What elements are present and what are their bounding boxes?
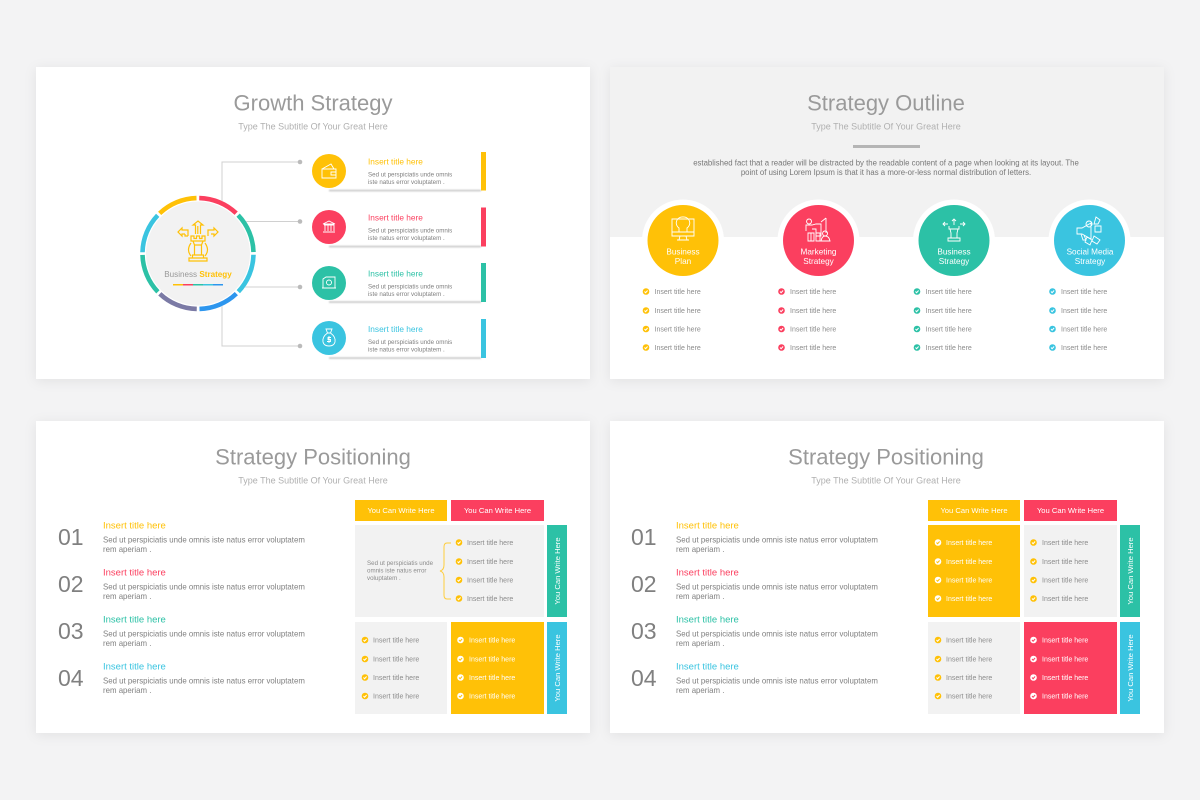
- heading: strategy positioning: Strategy Positioning: [215, 444, 411, 470]
- checklist: merged cell: [456, 539, 513, 603]
- checklist: Insert title here: [926, 345, 972, 352]
- checklist: [643, 288, 701, 352]
- numbered list: Insert title here: [103, 662, 166, 672]
- checklist: upper left cell: Insert title here: [946, 540, 992, 547]
- numbered list: rem aperiam .: [103, 592, 151, 601]
- column: business plan: Business: [666, 248, 700, 256]
- numbered list: Insert title here: [103, 568, 166, 578]
- checklist: lower right cell: Insert title here: [469, 638, 515, 644]
- column: business plan: [642, 200, 724, 352]
- matrix grid: You Can Write Here: [464, 506, 531, 515]
- label: business strategy: Business Strategy: [164, 270, 232, 279]
- checklist: lower left cell: Insert title here: [373, 638, 419, 644]
- checklist: lower left cell: Insert title here: [946, 656, 992, 664]
- numbered list: 04: [631, 665, 657, 691]
- item 1: wallet: Sed ut perspiciatis unde omnis: [368, 172, 452, 178]
- column: business strategy: Business: [937, 248, 971, 256]
- segmented ring: business strategy: [120, 175, 276, 332]
- matrix grid: [355, 500, 567, 714]
- column: business strategy: Strategy: [939, 257, 970, 266]
- checklist: [778, 288, 836, 352]
- checklist: lower right cell: Insert title here: [1042, 675, 1088, 682]
- connector lines: [222, 160, 302, 348]
- item 4: money bag: Sed ut perspiciatis unde omnis: [368, 339, 452, 346]
- matrix grid: [928, 500, 1140, 714]
- checklist: Insert title here: [926, 289, 972, 296]
- checklist: Insert title here: [654, 289, 701, 296]
- checklist: lower left cell: Insert title here: [946, 694, 992, 700]
- numbered list: 02: [58, 571, 84, 597]
- item 3: safe: iste natus error voluptatem .: [368, 291, 445, 298]
- matrix grid: You Can Write Here: [553, 537, 562, 605]
- numbered list: Insert title here: [676, 568, 739, 578]
- icon: monitor with bulb: [672, 217, 694, 240]
- checklist: upper right cell: Insert title here: [1042, 540, 1088, 547]
- subtitle: Type The Subtitle Of Your Great Here: [238, 122, 388, 132]
- numbered list: Sed ut perspiciatis unde omnis iste natus error voluptatem: [103, 676, 305, 686]
- checklist: [914, 288, 972, 352]
- icon: megaphone and social badges: [1077, 217, 1101, 245]
- numbered list: Sed ut perspiciatis unde omnis iste natus error voluptatem: [103, 582, 305, 592]
- checklist: lower right cell: Insert title here: [1042, 656, 1088, 664]
- column: marketing strategy: Strategy: [803, 257, 835, 266]
- checklist: Insert title here: [654, 326, 701, 334]
- numbered list: rem aperiam .: [676, 639, 724, 648]
- matrix grid: You Can Write Here: [553, 634, 562, 702]
- item 1: wallet: iste natus error voluptatem .: [368, 179, 445, 186]
- panel: strategy outline: [610, 67, 1164, 379]
- merged cell text: voluptatem .: [367, 575, 401, 582]
- numbered list: rem aperiam .: [103, 639, 151, 648]
- checklist: upper right cell: [1030, 539, 1088, 603]
- checklist: lower right cell: Insert title here: [1042, 638, 1088, 644]
- intro paragraph: point of using Lorem Ipsum is that it has a more-or-less normal distribution of letters.: [741, 168, 1031, 177]
- checklist: Insert title here: [790, 326, 836, 334]
- checklist: lower right cell: [1030, 637, 1088, 700]
- item 2: bank: Sed ut perspiciatis unde omnis: [368, 228, 452, 234]
- icon: megaphone and people: [806, 218, 830, 241]
- item 4: money bag: iste natus error voluptatem .: [368, 346, 445, 354]
- colour underline: [173, 284, 223, 286]
- checklist: upper right cell: Insert title here: [1042, 596, 1088, 603]
- checklist: lower right cell: Insert title here: [469, 694, 515, 700]
- subtitle: Type The Subtitle Of Your Great Here: [238, 476, 388, 486]
- intro paragraph: [693, 158, 1079, 177]
- checklist: upper left cell: Insert title here: [946, 578, 992, 584]
- numbered list: Insert title here: [103, 614, 166, 626]
- matrix grid: You Can Write Here: [1037, 506, 1104, 515]
- checklist: Insert title here: [790, 345, 836, 352]
- numbered list: rem aperiam .: [676, 545, 724, 554]
- checklist: lower left cell: Insert title here: [373, 656, 419, 664]
- checklist: merged cell: Insert title here: [467, 596, 513, 603]
- numbered list: Insert title here: [103, 520, 166, 532]
- item 1: wallet: Insert title here: [368, 156, 423, 166]
- subtitle: Type The Subtitle Of Your Great Here: [811, 476, 961, 486]
- numbered list: Insert title here: [676, 520, 739, 532]
- numbered list: 01: [631, 524, 657, 550]
- numbered list: 03: [631, 618, 657, 644]
- checklist: upper left cell: [935, 539, 992, 603]
- item 3: safe: Insert title here: [368, 268, 423, 278]
- icon: wallet: [322, 164, 336, 178]
- item 4: money bag: [312, 319, 486, 359]
- checklist: lower left cell: Insert title here: [373, 694, 419, 700]
- numbered list: rem aperiam .: [103, 686, 151, 695]
- panel: growth strategy: [36, 67, 1164, 733]
- matrix grid: You Can Write Here: [367, 506, 435, 515]
- matrix grid: You Can Write Here: [940, 506, 1008, 515]
- numbered list: Sed ut perspiciatis unde omnis iste natus error voluptatem: [103, 536, 305, 544]
- checklist: lower left cell: [935, 637, 992, 700]
- checklist: Insert title here: [1061, 345, 1107, 352]
- column: marketing strategy: Marketing: [801, 248, 837, 256]
- numbered list: Sed ut perspiciatis unde omnis iste natus error voluptatem: [676, 536, 878, 544]
- numbered list: 01: [58, 524, 84, 550]
- checklist: Insert title here: [654, 308, 701, 315]
- checklist: merged cell: Insert title here: [467, 540, 513, 547]
- checklist: Insert title here: [790, 289, 836, 296]
- checklist: Insert title here: [926, 308, 972, 315]
- intro paragraph: established fact that a reader will be distracted by the readable content of a page when looking at its layout. The: [693, 158, 1079, 168]
- numbered list: Sed ut perspiciatis unde omnis iste natus error voluptatem: [103, 630, 305, 638]
- column: business plan: Plan: [675, 257, 692, 266]
- checklist: lower left cell: [362, 637, 419, 700]
- checklist: upper left cell: Insert title here: [946, 596, 992, 603]
- bracket: [440, 543, 451, 599]
- checklist: [1049, 288, 1107, 352]
- checklist: Insert title here: [1061, 326, 1107, 334]
- icon: safe: [322, 277, 336, 288]
- checklist: merged cell: Insert title here: [467, 578, 513, 584]
- item 1: wallet: [312, 152, 486, 191]
- item 3: safe: [312, 263, 486, 303]
- subtitle: Type The Subtitle Of Your Great Here: [811, 122, 961, 132]
- item 2: bank: Insert title here: [368, 212, 423, 222]
- checklist: lower right cell: Insert title here: [469, 675, 515, 682]
- column: marketing strategy: [778, 200, 860, 352]
- checklist: upper right cell: Insert title here: [1042, 559, 1088, 566]
- icon: chess rook with arrows: [178, 221, 218, 261]
- checklist: Insert title here: [1061, 308, 1107, 315]
- checklist: Insert title here: [926, 326, 972, 334]
- numbered list: rem aperiam .: [103, 545, 151, 554]
- numbered list: Sed ut perspiciatis unde omnis iste natus error voluptatem: [676, 676, 878, 686]
- item 3: safe: Sed ut perspiciatis unde omnis: [368, 284, 452, 290]
- checklist: merged cell: Insert title here: [467, 559, 513, 566]
- numbered list: 02: [631, 571, 657, 597]
- numbered list: 03: [58, 618, 84, 644]
- merged cell text: Sed ut perspiciatis unde: [367, 560, 434, 567]
- heading: strategy positioning: Strategy Positioning: [788, 444, 984, 470]
- numbered list: rem aperiam .: [676, 686, 724, 695]
- numbered list: Sed ut perspiciatis unde omnis iste natus error voluptatem: [676, 582, 878, 592]
- numbered list: 04: [58, 665, 84, 691]
- item 4: money bag: Insert title here: [368, 324, 423, 334]
- checklist: lower right cell: Insert title here: [469, 656, 515, 664]
- checklist: upper right cell: Insert title here: [1042, 578, 1088, 584]
- checklist: Insert title here: [654, 345, 701, 352]
- heading: strategy outline: Strategy Outline: [807, 90, 965, 116]
- merged cell text: omnis iste natus error: [367, 568, 426, 574]
- column: social media strategy: Social Media: [1067, 248, 1114, 256]
- numbered list: rem aperiam .: [676, 592, 724, 601]
- column: social media strategy: [1048, 200, 1130, 352]
- icon: bank: [323, 221, 335, 232]
- icon: rook with arrows: [943, 219, 965, 241]
- numbered list: Sed ut perspiciatis unde omnis iste natus error voluptatem: [676, 630, 878, 638]
- icon: money bag: [323, 329, 335, 346]
- checklist: upper left cell: Insert title here: [946, 559, 992, 566]
- heading: growth strategy: Growth Strategy: [234, 90, 392, 116]
- item 2: bank: iste natus error voluptatem .: [368, 235, 445, 242]
- numbered list: Insert title here: [676, 614, 739, 626]
- item 2: bank: [312, 208, 486, 247]
- numbered list: Insert title here: [676, 662, 739, 672]
- column: social media strategy: Strategy: [1075, 257, 1106, 266]
- checklist: Insert title here: [790, 308, 836, 315]
- checklist: Insert title here: [1061, 289, 1107, 296]
- matrix grid: You Can Write Here: [1126, 537, 1135, 605]
- checklist: lower left cell: Insert title here: [373, 675, 419, 682]
- checklist: lower left cell: Insert title here: [946, 638, 992, 644]
- checklist: lower left cell: Insert title here: [946, 675, 992, 682]
- panel: strategy positioning left: [36, 421, 590, 733]
- matrix grid: You Can Write Here: [1126, 634, 1135, 702]
- column: business strategy: [913, 200, 995, 352]
- merged cell text: [367, 560, 434, 582]
- checklist: lower right cell: [457, 637, 515, 700]
- numbered list: [58, 520, 305, 695]
- numbered list: [631, 520, 878, 695]
- panel: strategy positioning right: [610, 421, 1164, 733]
- checklist: lower right cell: Insert title here: [1042, 694, 1088, 700]
